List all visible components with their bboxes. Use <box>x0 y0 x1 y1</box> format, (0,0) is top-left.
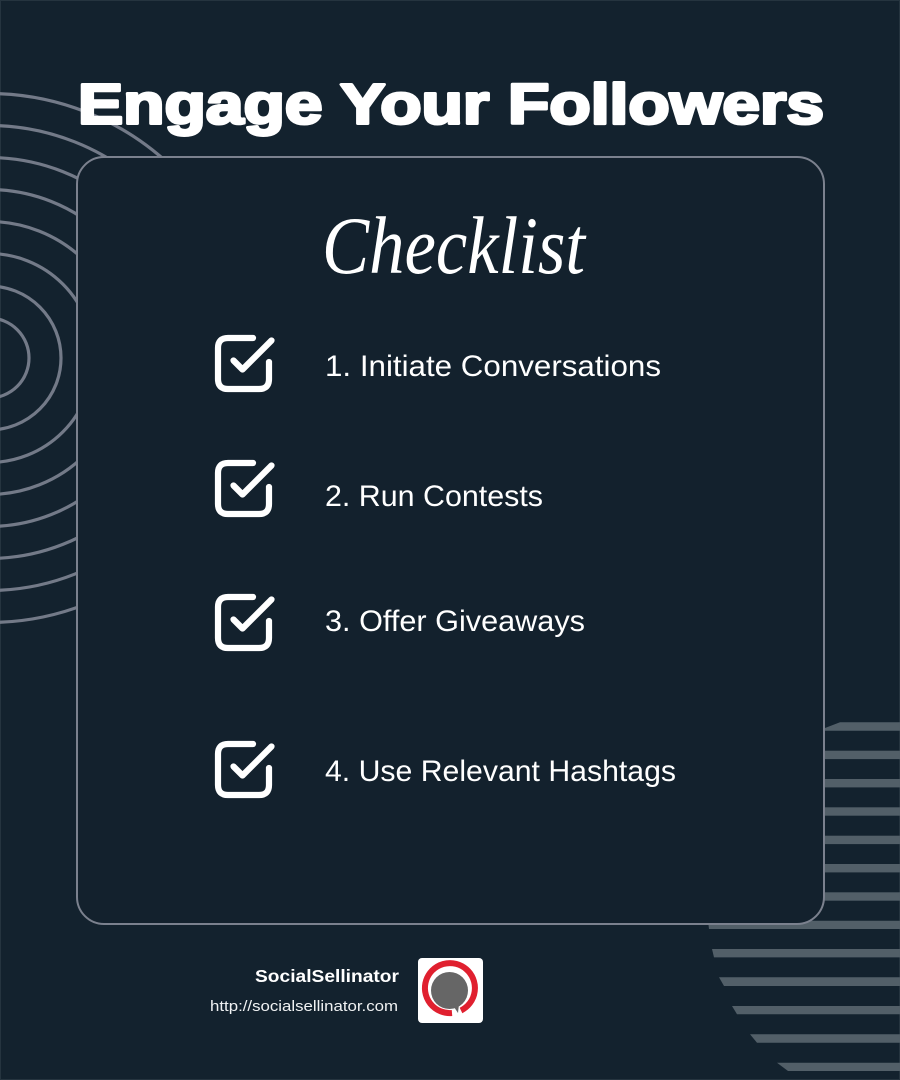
item text 3: 3. Offer Giveaways <box>325 605 585 638</box>
checklist item 1 <box>218 338 661 389</box>
checklist item 2 <box>218 463 543 514</box>
checklist item 4 <box>218 744 676 795</box>
icon: checkbox 1 <box>218 338 272 389</box>
item text 4: 4. Use Relevant Hashtags <box>325 755 676 788</box>
decorative concentric circles <box>0 94 254 622</box>
footer brand <box>210 958 483 1023</box>
brand name: SocialSellinator <box>255 966 399 986</box>
panel background <box>77 157 824 924</box>
icon: checkbox 4 <box>218 744 272 795</box>
checklist item 3 <box>218 597 585 648</box>
panel heading: Checklist: Checklist <box>322 200 587 291</box>
icon: checkbox 2 <box>218 463 272 514</box>
icon: logo <box>418 958 483 1023</box>
icon: checkbox 3 <box>218 597 272 648</box>
title: Engage Your Followers <box>78 72 824 136</box>
item text 1: 1. Initiate Conversations <box>325 350 661 383</box>
panel: checklist <box>77 157 824 924</box>
item text 2: 2. Run Contests <box>325 480 543 513</box>
brand url: http://socialsellinator.com <box>210 998 398 1015</box>
decorative striped circle <box>708 722 900 1071</box>
